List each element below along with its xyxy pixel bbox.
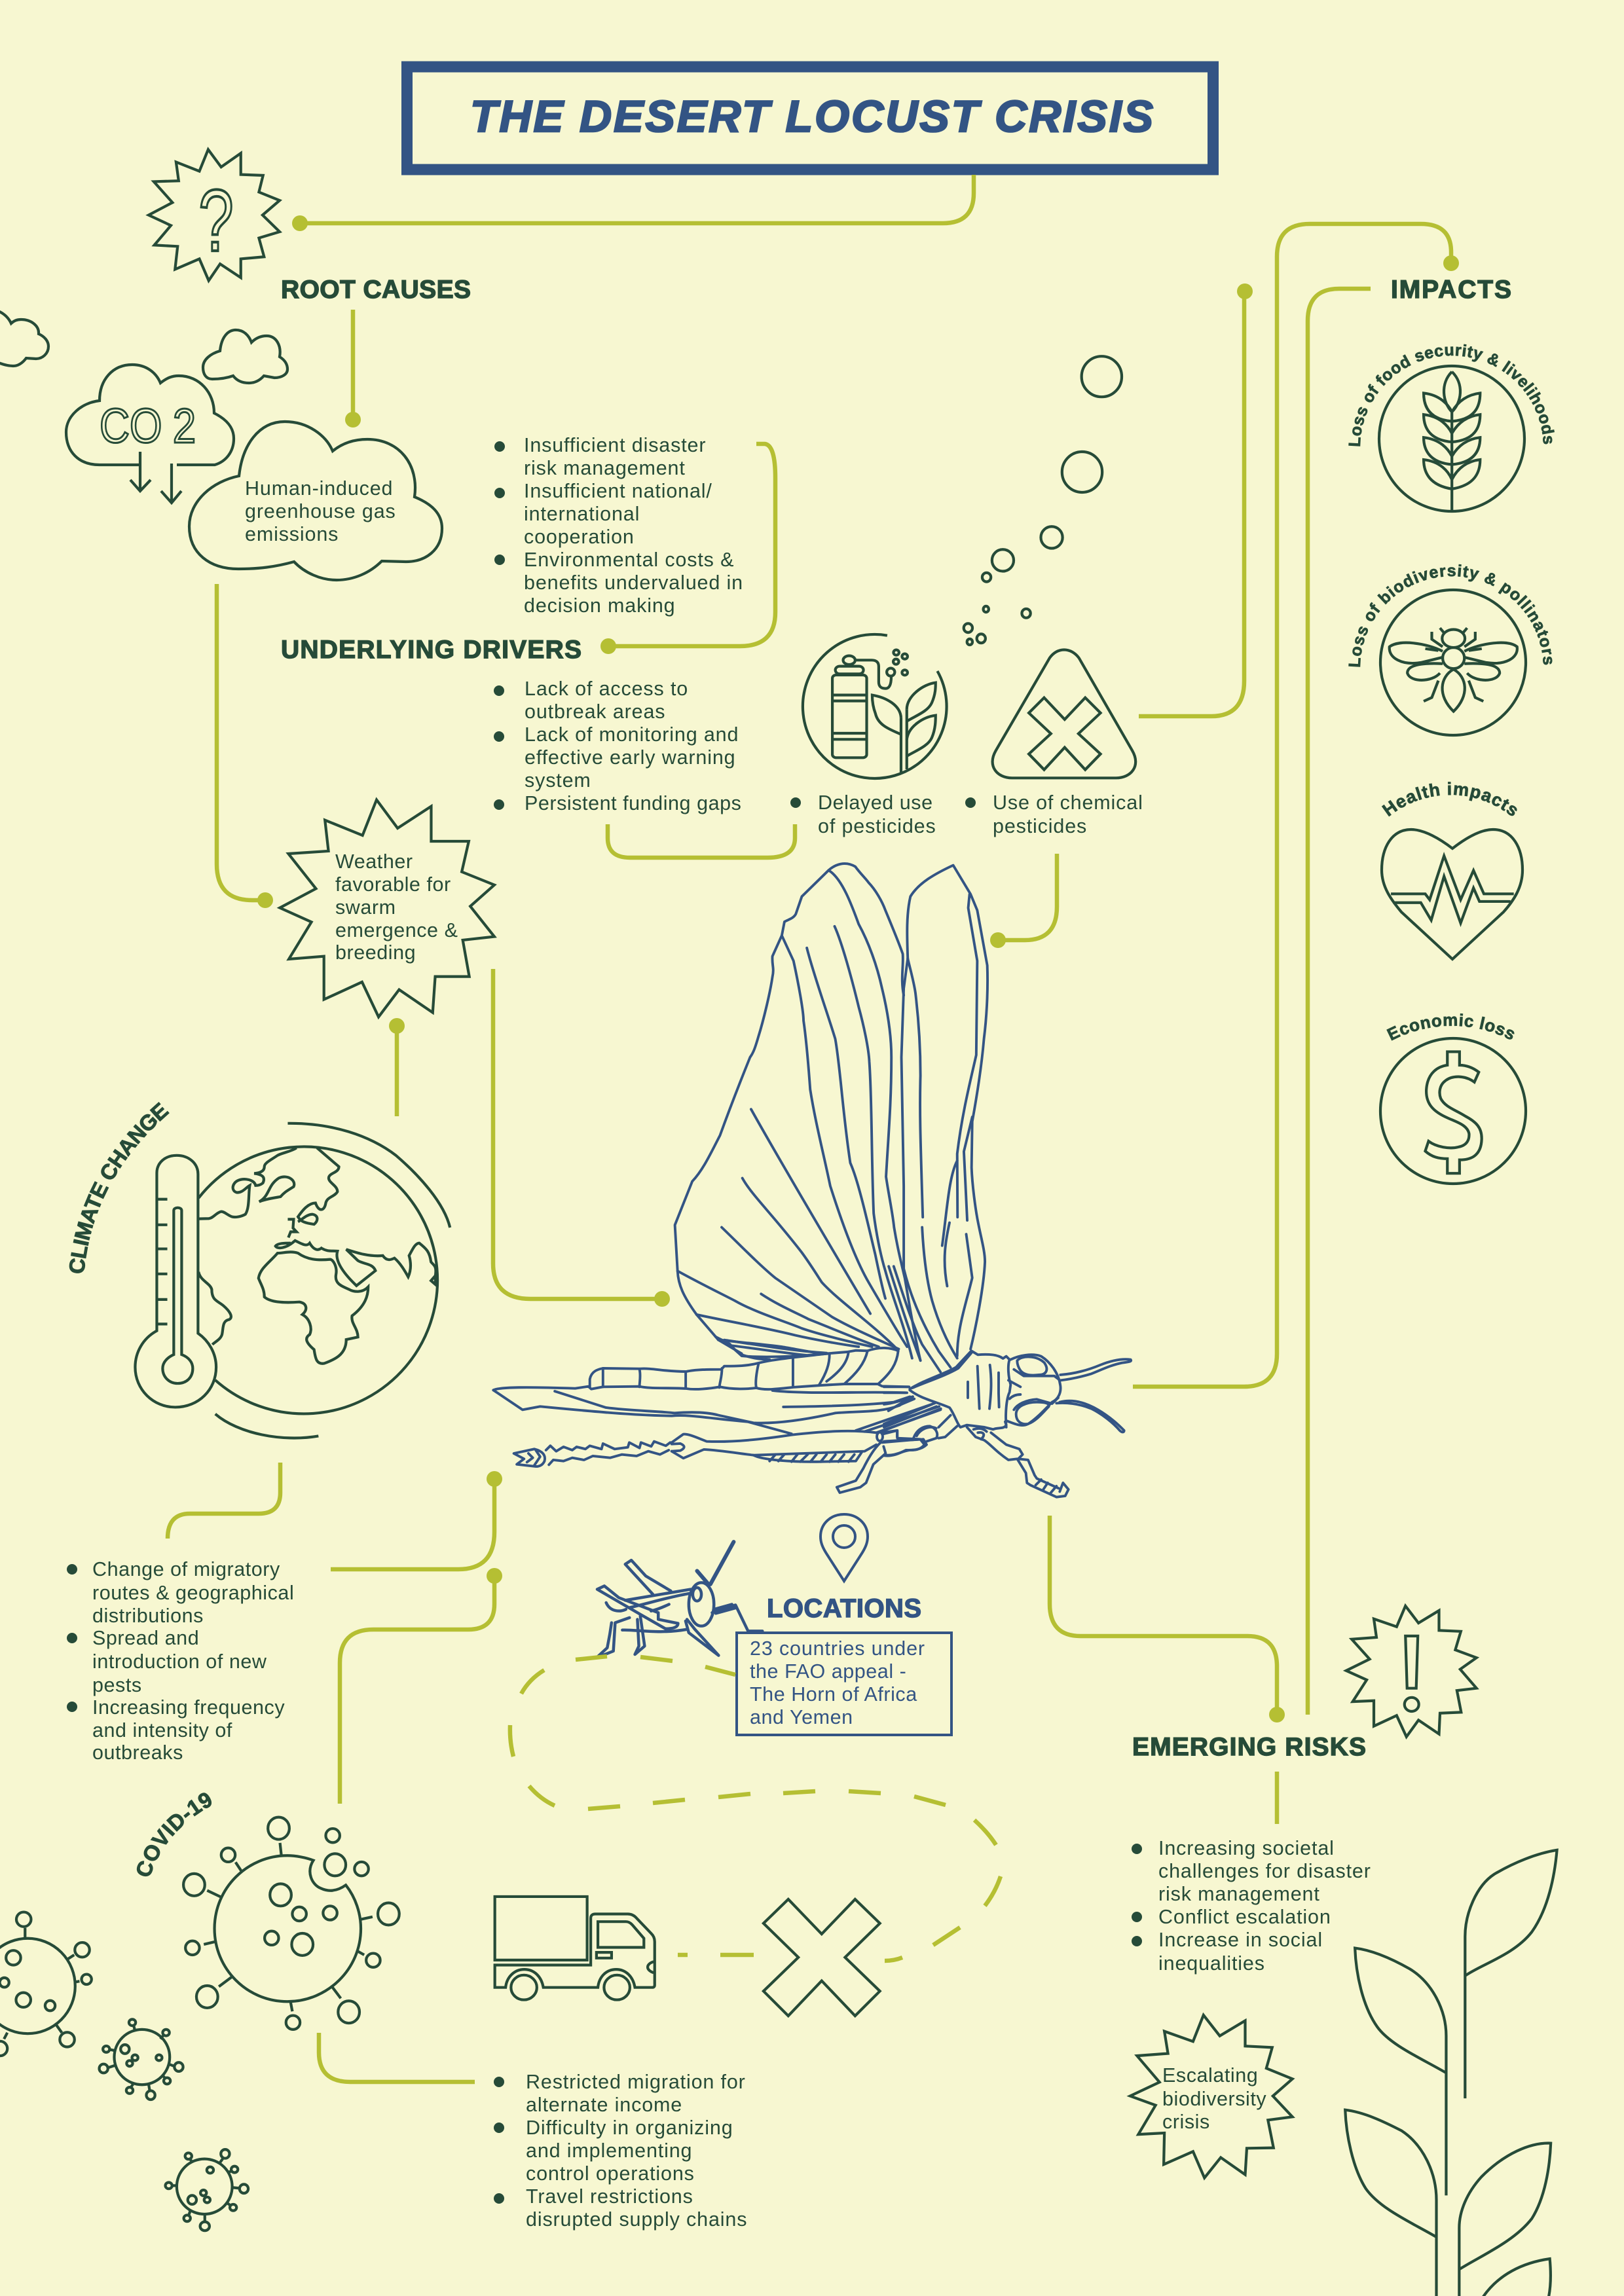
locust wings <box>675 864 987 1372</box>
heading: locations: LOCATIONS <box>767 1594 921 1623</box>
virus: small bottom <box>166 2149 248 2231</box>
icon: location pin <box>821 1514 868 1581</box>
box: locations text: and Yemen <box>750 1706 853 1728</box>
icon: truck <box>495 1897 655 2000</box>
virus: left <box>0 1912 92 2056</box>
locust illustration <box>493 864 1131 1497</box>
dashed route <box>510 1656 1001 1961</box>
list: climate change effects <box>67 1558 294 1764</box>
connector: weather to locust <box>493 969 670 1307</box>
icon: chemical bubbles <box>964 356 1122 645</box>
list: access and funding: Persistent funding gaps <box>525 792 741 814</box>
connector: locust to emerging risks <box>1050 1516 1285 1722</box>
list: emerging risks: Conflict escalation <box>1158 1906 1331 1928</box>
heading: emerging risks: EMERGING RISKS <box>1132 1733 1366 1761</box>
list: underlying causes: Insufficient national/ <box>524 480 712 502</box>
list: climate change effects: Spread and <box>92 1627 199 1649</box>
connector: covid to list <box>319 2033 475 2082</box>
text: delayed use of pesticides: of pesticides <box>818 815 936 837</box>
connector: causes bracket to underlying drivers <box>600 444 775 654</box>
list: covid-19 impacts: and implementing <box>526 2140 692 2162</box>
impact: health <box>1380 782 1524 961</box>
connector: funding to delayed use bracket <box>608 824 795 858</box>
text: delayed use of pesticides: Delayed use <box>818 792 933 814</box>
list: access and funding: effective early warning <box>525 746 735 769</box>
list: climate change effects: introduction of new <box>92 1650 267 1673</box>
list: climate change effects: Change of migratory <box>92 1558 280 1580</box>
box: locations text: 23 countries under <box>750 1637 925 1660</box>
list: emerging risks: challenges for disaster <box>1158 1860 1371 1882</box>
heading: covid-19: COVID-19 <box>136 1793 212 1876</box>
list: climate change effects: pests <box>92 1674 142 1696</box>
cloud: greenhouse gas emissions <box>189 422 442 580</box>
starburst: escalating biodiversity crisis: crisis <box>1162 2111 1210 2133</box>
icon: plant <box>1345 1850 1557 2296</box>
impact: health: Health impacts <box>1382 782 1517 817</box>
starburst: escalating biodiversity crisis <box>1130 2015 1293 2178</box>
icon: big X <box>764 1899 880 2016</box>
connector: locust to impacts <box>1133 224 1459 1387</box>
heading: impacts: IMPACTS <box>1391 276 1511 304</box>
icon: grasshopper <box>597 1542 762 1658</box>
icon: CO2 cloud with arrows: CO <box>100 399 174 453</box>
icon: exclamation starburst <box>1346 1606 1477 1737</box>
starburst: weather: swarm <box>335 896 396 919</box>
list: emerging risks <box>1132 1837 1371 1975</box>
icon: chemical warning triangle <box>993 649 1135 778</box>
box: locations text: The Horn of Africa <box>750 1683 917 1705</box>
impact: biodiversity and pollinators: Loss of biodiversity & pollinators <box>1348 564 1552 667</box>
connector: climate list to locust <box>331 1471 502 1569</box>
starburst: weather: emergence & <box>335 919 458 941</box>
icon: question starburst: ? <box>198 171 234 270</box>
virus: small middle <box>100 2019 183 2100</box>
list: climate change effects: distributions <box>92 1605 204 1627</box>
list: covid-19 impacts: disrupted supply chains <box>526 2208 747 2231</box>
icon: small cloud left edge <box>0 310 48 366</box>
list: underlying causes <box>494 434 743 617</box>
list: covid-19 impacts <box>494 2071 747 2231</box>
list: climate change effects: outbreaks <box>92 1741 183 1764</box>
icon: thermometer and globe <box>135 1123 450 1438</box>
cloud: greenhouse gas emissions: emissions <box>245 523 339 545</box>
connector: emerging risks to list <box>1275 1772 1279 1824</box>
icon: small cloud <box>203 330 287 383</box>
text: use of chemical pesticides <box>965 792 1143 837</box>
locust abdomen and hind leg <box>493 1337 940 1493</box>
list: covid-19 impacts: Restricted migration for <box>526 2071 746 2093</box>
text: delayed use of pesticides <box>790 792 936 837</box>
list: underlying causes: risk management <box>524 457 686 479</box>
list: covid-19 impacts: control operations <box>526 2162 695 2185</box>
heading: root causes: ROOT CAUSES <box>281 276 471 304</box>
list: covid-19 impacts: alternate income <box>526 2094 682 2116</box>
connector: cloud to weather star <box>217 584 273 908</box>
connector: climate to weather <box>389 1018 405 1116</box>
list: underlying causes: benefits undervalued in <box>524 572 743 594</box>
starburst: weather: favorable for <box>335 873 451 896</box>
list: climate change effects: Increasing frequency <box>92 1696 285 1719</box>
impact: biodiversity and pollinators <box>1348 564 1552 737</box>
impact: economic loss: Economic loss <box>1386 1013 1514 1041</box>
list: emerging risks: risk management <box>1158 1883 1320 1905</box>
list: access and funding: system <box>525 769 591 792</box>
list: emerging risks: Increasing societal <box>1158 1837 1335 1859</box>
connector: root causes to cloud <box>345 310 361 428</box>
icon: CO2 cloud with arrows <box>66 365 234 503</box>
list: emerging risks: inequalities <box>1158 1952 1265 1975</box>
heading: underlying drivers: UNDERLYING DRIVERS <box>281 636 581 664</box>
connector: emerging risks to impacts <box>1308 289 1371 1715</box>
impact: economic loss <box>1379 1013 1527 1185</box>
starburst: weather: Weather <box>335 850 413 873</box>
connector: chemical to locust wing <box>990 854 1057 948</box>
list: underlying causes: Environmental costs & <box>524 549 734 571</box>
list: underlying causes: Insufficient disaster <box>524 434 706 456</box>
locust head and thorax <box>884 1351 1131 1497</box>
list: covid-19 impacts: Travel restrictions <box>526 2185 693 2208</box>
list: underlying causes: cooperation <box>524 526 635 548</box>
starburst: weather: breeding <box>335 941 416 964</box>
icon: viruses <box>0 1817 399 2231</box>
list: emerging risks: Increase in social <box>1158 1929 1323 1951</box>
list: climate change effects: routes & geographical <box>92 1582 294 1604</box>
starburst: escalating biodiversity crisis: Escalating <box>1162 2064 1258 2086</box>
icon: CO2 cloud with arrows: 2 <box>173 399 196 453</box>
list: underlying causes: international <box>524 503 640 525</box>
list: access and funding: Lack of monitoring and <box>525 723 739 746</box>
list: climate change effects: and intensity of <box>92 1719 232 1741</box>
list: access and funding: outbreak areas <box>525 701 665 723</box>
cloud: greenhouse gas emissions: Human-induced <box>245 477 393 500</box>
list: covid-19 impacts: Difficulty in organizing <box>526 2117 733 2139</box>
title <box>407 67 1213 170</box>
icon: pesticide sprayer and plant <box>803 634 947 778</box>
list: access and funding: Lack of access to <box>525 678 688 700</box>
starburst: escalating biodiversity crisis: biodiversity <box>1162 2088 1266 2110</box>
virus: main <box>183 1817 399 2030</box>
starburst: weather <box>280 800 494 1017</box>
impact: food security: Loss of food security & livelihoods <box>1348 344 1555 446</box>
list: access and funding <box>494 678 741 814</box>
box: locations text <box>737 1633 951 1735</box>
text: use of chemical pesticides: pesticides <box>993 815 1087 837</box>
box: locations text: the FAO appeal - <box>750 1660 906 1683</box>
icon: question starburst <box>149 149 280 281</box>
impact: food security <box>1348 344 1555 513</box>
cloud: greenhouse gas emissions: greenhouse gas <box>245 500 396 522</box>
connector: triangle upward <box>1139 283 1253 716</box>
connector: climate change to list <box>168 1463 280 1539</box>
text: use of chemical pesticides: Use of chemical <box>993 792 1143 814</box>
heading: climate change: CLIMATE CHANGE <box>69 1102 170 1273</box>
title: THE DESERT LOCUST CRISIS <box>470 92 1153 141</box>
list: underlying causes: decision making <box>524 594 675 617</box>
connector: title to root causes <box>292 175 974 231</box>
connector: covid to locust <box>340 1568 502 1804</box>
